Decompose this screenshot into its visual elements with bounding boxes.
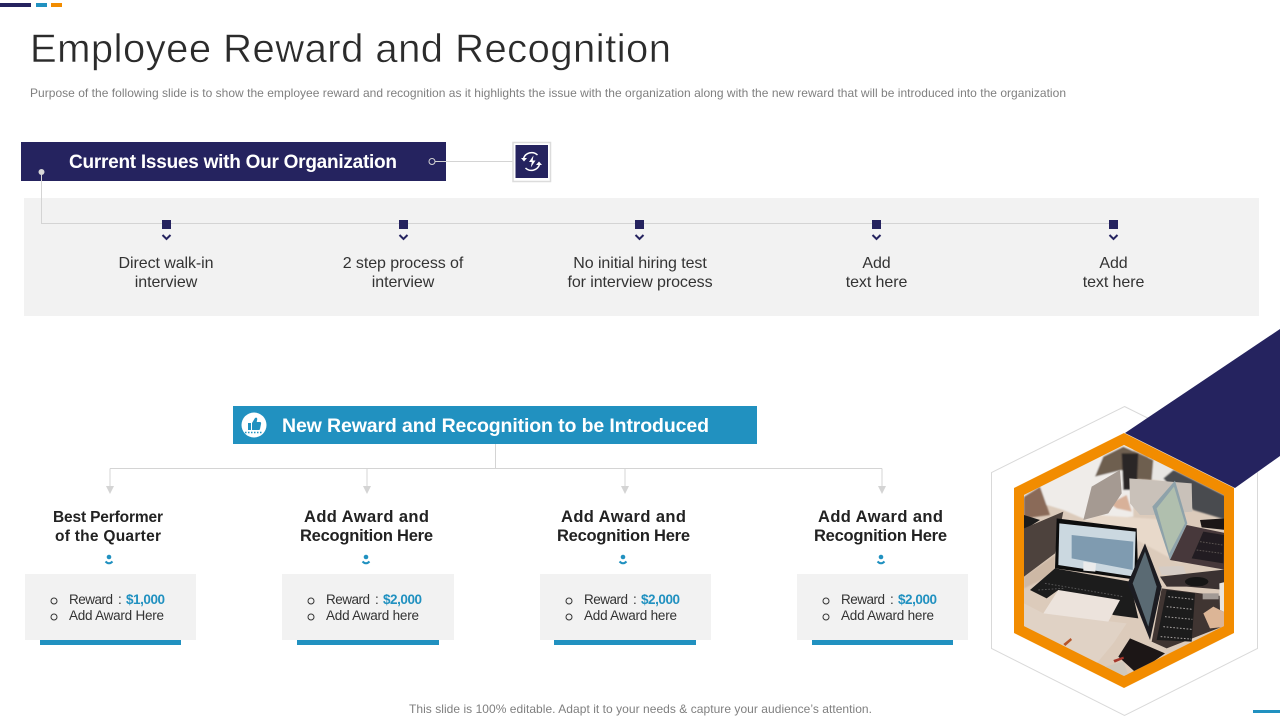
hexagon photo group [992, 329, 1280, 716]
reward 2 heading: Recognition Here [300, 527, 433, 545]
panel: reward 4 [797, 508, 968, 645]
reward 3 accent bar [554, 640, 696, 645]
issue 1 text: interview [135, 274, 198, 291]
issue 5 text: Add [1099, 255, 1128, 272]
reward 3 card [540, 574, 711, 640]
reward 1 marker [106, 555, 112, 563]
reward 3 list: Add Award here [584, 608, 677, 623]
reward 2 list: : [375, 592, 379, 607]
issue 4 text: text here [846, 274, 907, 291]
panel: reward 3 [540, 508, 711, 645]
issue 5 text: text here [1083, 274, 1144, 291]
connector lines [39, 158, 1114, 224]
reward 4 accent bar [812, 640, 953, 645]
reward 4 list: : [890, 592, 894, 607]
reward 4 list: Reward [841, 592, 885, 607]
issue 2 text: 2 step process of [343, 255, 464, 272]
reward 2 list: Reward [326, 592, 370, 607]
panel: reward 1 [25, 509, 196, 645]
reward 3 list [566, 592, 680, 623]
reward 3 heading: Recognition Here [557, 527, 690, 545]
panel: current issues [21, 142, 1259, 316]
footer note: This slide is 100% editable. Adapt it to your needs & capture your audience’s attention. [409, 702, 872, 716]
issues background [24, 198, 1259, 316]
orange hexagon [1014, 433, 1234, 688]
title: Employee Reward and Recognition [30, 27, 671, 71]
step markers [162, 220, 1118, 229]
icon: thumbs up [242, 412, 266, 438]
reward 3 marker [620, 555, 626, 563]
reward 2 list: $2,000 [383, 592, 422, 607]
step chevrons [162, 235, 1118, 239]
reward 4 list [823, 592, 937, 623]
reward 1 heading: of the Quarter [55, 528, 161, 545]
photo: laptops on a desk [1020, 440, 1227, 676]
new reward banner [233, 406, 757, 444]
reward 1 card [25, 574, 196, 640]
panel: reward 2 [282, 508, 454, 645]
reward 4 list: $2,000 [898, 592, 937, 607]
outer hexagon outline [992, 406, 1258, 716]
navy diagonal band [1125, 329, 1280, 488]
reward 3 list: Reward [584, 592, 628, 607]
issues header bar [21, 142, 446, 181]
reward 4 card [797, 574, 968, 640]
reward 1 accent bar [40, 640, 181, 645]
reward 1 list: Reward [69, 592, 113, 607]
reward 2 list: Add Award here [326, 608, 419, 623]
reward 2 card [282, 574, 454, 640]
reward 3 list: $2,000 [641, 592, 680, 607]
reward 2 marker [362, 555, 370, 563]
bottom right accent [1253, 710, 1280, 713]
reward 4 heading: Recognition Here [814, 527, 947, 545]
reward 3 heading: Add Award and [561, 508, 686, 526]
reward 2 heading: Add Award and [304, 508, 429, 526]
top accent bars [0, 3, 62, 7]
issue 3 text: for interview process [567, 274, 713, 291]
banner heading: New Reward and Recognition to be Introduced [282, 415, 709, 437]
icon: energy cycle [513, 142, 550, 182]
issue 3 text: No initial hiring test [573, 255, 707, 272]
reward 1 list: $1,000 [126, 592, 165, 607]
reward 2 list [308, 592, 422, 623]
reward 1 list: Add Award Here [69, 608, 164, 623]
issues heading: Current Issues with Our Organization [69, 152, 397, 173]
subtitle: Purpose of the following slide is to show the employee reward and recognition as it highlights the issue with the organization along with the new reward that will be introduced into the organization [30, 86, 1066, 100]
connector tree [106, 444, 886, 494]
reward 1 list: : [118, 592, 122, 607]
reward 2 accent bar [297, 640, 439, 645]
reward 4 heading: Add Award and [818, 508, 943, 526]
issue 4 text: Add [862, 255, 891, 272]
issue 2 text: interview [372, 274, 435, 291]
reward 4 marker [878, 555, 884, 563]
reward 4 list: Add Award here [841, 608, 934, 623]
reward 1 heading: Best Performer [53, 509, 163, 526]
reward 3 list: : [633, 592, 637, 607]
issue 1 text: Direct walk-in [119, 255, 213, 272]
reward 1 list [51, 592, 165, 623]
